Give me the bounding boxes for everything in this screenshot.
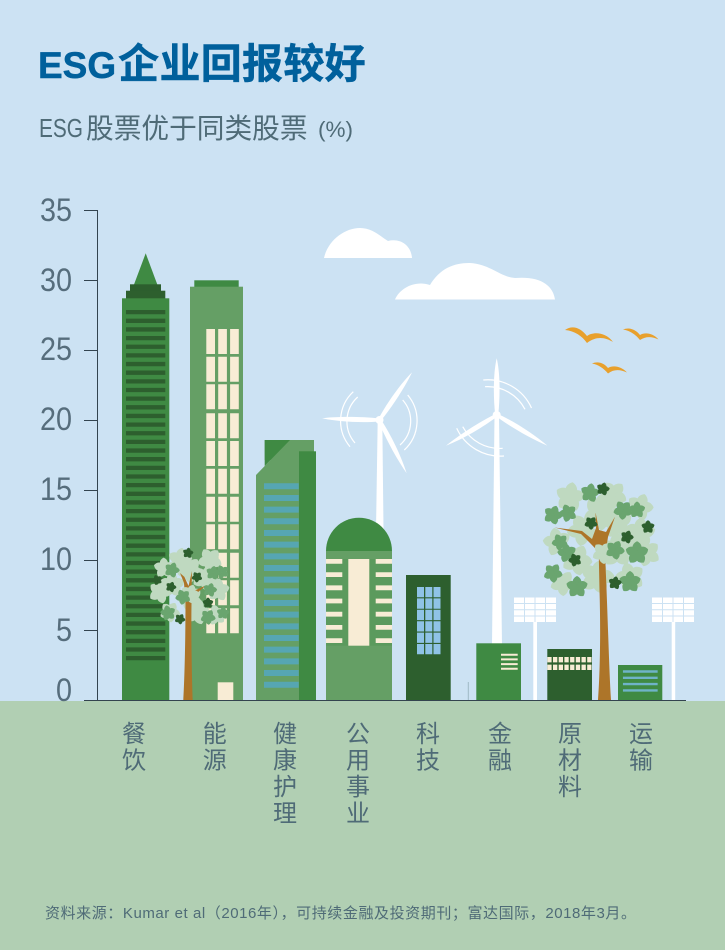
y axis labels — [40, 192, 72, 708]
tree: right — [536, 474, 667, 700]
label: 原材料: 料 — [558, 774, 582, 801]
wind turbine left — [322, 371, 417, 530]
label: 公用事业: 事 — [346, 774, 370, 801]
label: 健康护理: 健 — [273, 721, 297, 748]
building: 运输 — [618, 665, 662, 700]
building: 健康护理 — [256, 440, 316, 700]
cloud right — [395, 263, 555, 300]
y axis labels: 20 — [40, 401, 72, 437]
label: 运输 — [629, 721, 653, 774]
label: 健康护理: 理 — [273, 800, 297, 828]
label: 健康护理: 康 — [273, 748, 297, 774]
y axis — [84, 210, 686, 700]
label: 能源: 能 — [203, 721, 227, 748]
sky background — [0, 0, 725, 701]
thin post — [467, 682, 469, 700]
y axis labels: 25 — [40, 331, 72, 367]
wind turbine right — [445, 358, 549, 645]
building: 原材料 — [547, 649, 592, 700]
y axis labels: 5 — [56, 612, 72, 648]
label: 原材料 — [558, 721, 582, 801]
label: 公用事业: 用 — [346, 748, 370, 774]
y axis labels: 10 — [40, 541, 72, 577]
y axis labels: 30 — [40, 262, 72, 298]
label: 餐饮: 饮 — [122, 748, 146, 774]
cloud left — [324, 228, 412, 258]
subtitle: (%) — [318, 117, 353, 142]
building: 科技 — [406, 575, 451, 700]
label: 能源 — [203, 721, 227, 774]
y axis labels: 15 — [40, 471, 72, 507]
label: 餐饮 — [122, 721, 146, 774]
label: 金融: 融 — [488, 748, 512, 774]
building: 餐饮 tower — [122, 253, 169, 700]
label: 公用事业: 公 — [346, 721, 370, 748]
label: 运输: 运 — [629, 721, 653, 748]
label: 科技: 科 — [416, 721, 440, 748]
y axis labels: 0 — [56, 672, 72, 708]
label: 能源: 源 — [203, 748, 227, 774]
floodlight 1 — [514, 598, 556, 700]
subtitle: 股票优于同类股票 — [86, 113, 308, 144]
label: 科技: 技 — [416, 748, 440, 774]
label: 金融 — [488, 721, 512, 774]
label: 运输: 输 — [629, 748, 653, 774]
floodlight 2 — [652, 598, 694, 700]
label: 金融: 金 — [488, 721, 512, 748]
birds — [565, 327, 658, 374]
y axis labels: 35 — [40, 192, 72, 228]
label: 原材料: 原 — [558, 721, 582, 748]
title: ESG企业回报较好 — [38, 41, 366, 87]
label: 公用事业: 业 — [346, 800, 370, 828]
building: 公用事业 — [326, 518, 392, 700]
label: 科技 — [416, 721, 440, 774]
label: 公用事业 — [346, 721, 370, 828]
tree: left — [144, 542, 232, 700]
building: 金融 — [476, 643, 521, 700]
source note: 资料来源：Kumar et al（2016年），可持续金融及投资期刊；富达国际，2018年3月。 — [45, 904, 636, 922]
subtitle: ESG — [39, 113, 83, 143]
ground — [0, 701, 725, 950]
building: 能源 tower — [190, 280, 243, 700]
label: 餐饮: 餐 — [122, 721, 146, 748]
label: 原材料: 材 — [558, 748, 582, 774]
label: 健康护理 — [273, 721, 297, 828]
label: 健康护理: 护 — [273, 774, 297, 801]
